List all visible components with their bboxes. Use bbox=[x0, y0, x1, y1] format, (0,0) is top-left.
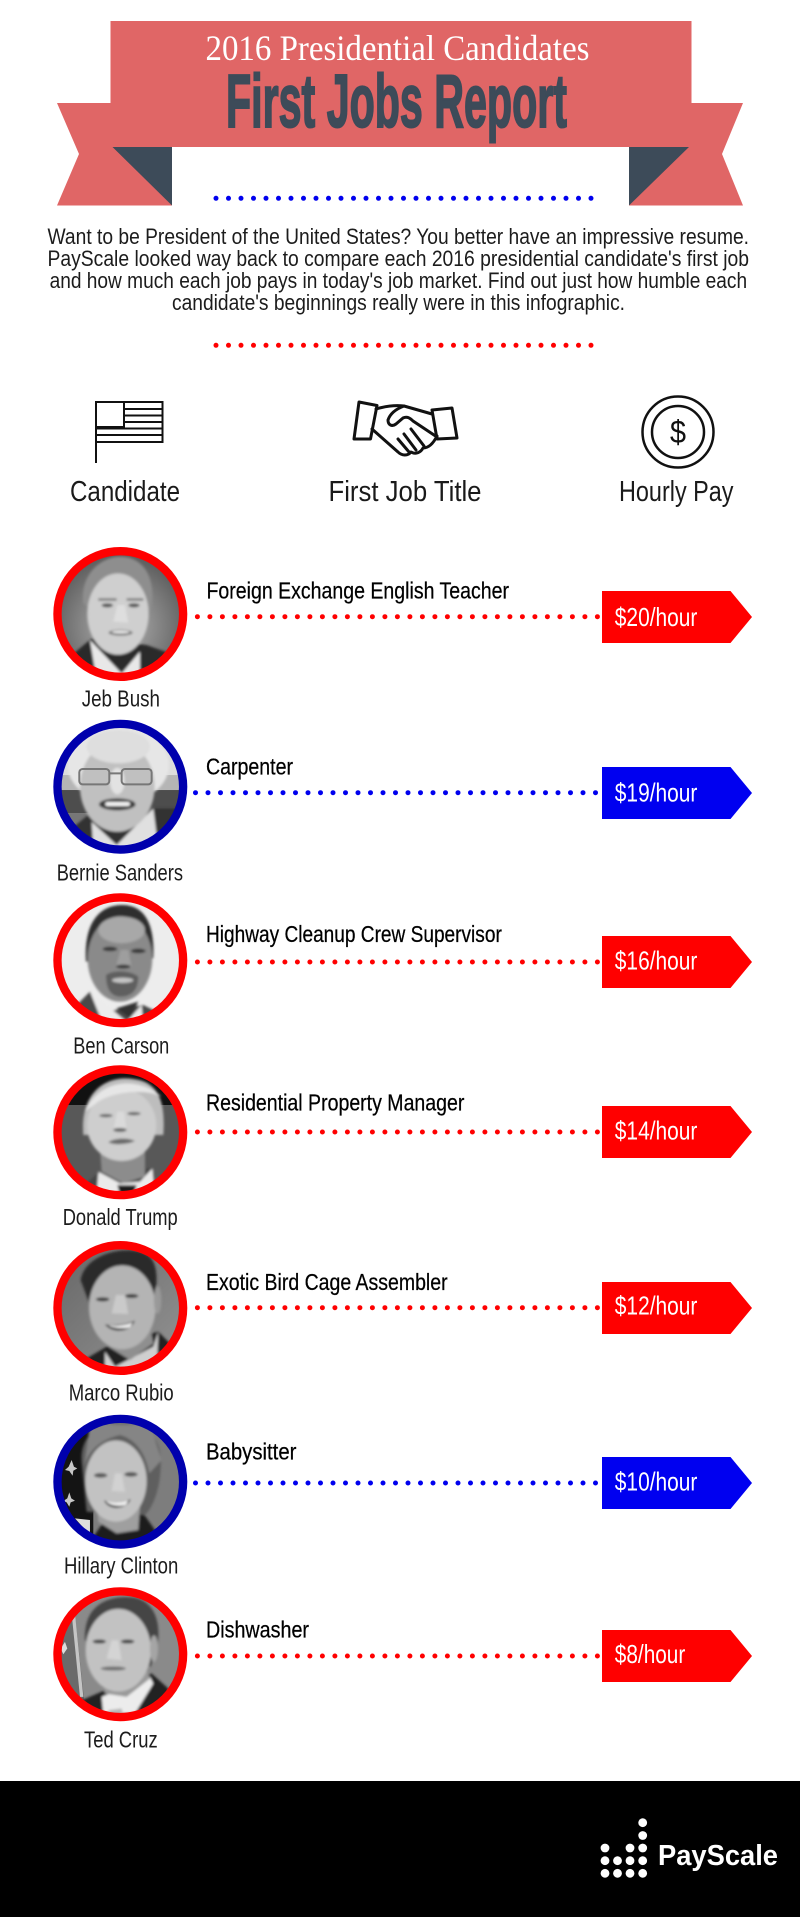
row: Bernie Sanders bbox=[57, 722, 752, 886]
red dotted divider bbox=[216, 343, 594, 348]
intro paragraph bbox=[48, 224, 749, 315]
pay tag bbox=[602, 1106, 752, 1158]
row: Marco Rubio bbox=[57, 1243, 752, 1406]
row: Hillary Clinton bbox=[57, 1418, 752, 1578]
portrait: Donald Trump bbox=[57, 1068, 183, 1198]
job title: Carpenter bbox=[206, 753, 293, 779]
pay tag: $10/hour bbox=[615, 1467, 698, 1497]
candidate name: Marco Rubio bbox=[69, 1380, 174, 1406]
logo wordmark: PayScale bbox=[658, 1840, 778, 1872]
ribbon right fold bbox=[629, 146, 690, 206]
blue dotted divider bbox=[216, 196, 594, 201]
footer bar bbox=[0, 1781, 800, 1917]
pay tag: $12/hour bbox=[615, 1290, 698, 1320]
pay tag: $14/hour bbox=[615, 1115, 698, 1145]
column heading: first job title: First Job Title bbox=[328, 476, 482, 508]
portrait: Jeb Bush bbox=[57, 550, 183, 680]
pay tag bbox=[602, 1282, 752, 1334]
pay tag bbox=[602, 1457, 752, 1509]
candidate name: Hillary Clinton bbox=[64, 1552, 178, 1578]
job title: Exotic Bird Cage Assembler bbox=[206, 1269, 448, 1295]
pay tag: $19/hour bbox=[615, 778, 698, 808]
subtitle: 2016 Presidential Candidates bbox=[206, 28, 590, 68]
pay tag bbox=[602, 1630, 752, 1682]
job title: Residential Property Manager bbox=[206, 1090, 465, 1116]
portrait: Marco Rubio bbox=[57, 1243, 183, 1373]
ribbon left tail bbox=[57, 103, 172, 206]
dotted connector bbox=[197, 960, 599, 964]
ribbon left fold bbox=[112, 147, 172, 206]
portrait: Hillary Clinton bbox=[57, 1418, 183, 1548]
job title: Dishwasher bbox=[206, 1616, 309, 1642]
candidate name: Jeb Bush bbox=[82, 686, 160, 712]
banner ribbon bbox=[57, 21, 743, 206]
row: Ted Cruz bbox=[57, 1590, 752, 1752]
dotted connector bbox=[183, 790, 597, 795]
pay tag bbox=[602, 936, 752, 988]
dotted connector bbox=[197, 614, 599, 619]
pay tag bbox=[602, 767, 752, 819]
job title: Foreign Exchange English Teacher bbox=[206, 577, 509, 603]
row: Jeb Bush bbox=[57, 550, 752, 712]
icon: handshake bbox=[354, 402, 457, 455]
job title: Highway Cleanup Crew Supervisor bbox=[206, 921, 502, 947]
column heading: hourly pay: Hourly Pay bbox=[619, 476, 734, 508]
ribbon right tail bbox=[629, 103, 743, 206]
icon: dollar coin: $ bbox=[670, 414, 686, 450]
pay tag: $16/hour bbox=[615, 945, 698, 975]
intro paragraph: candidate's beginnings really were in this infographic. bbox=[172, 290, 625, 315]
portrait: Ben Carson bbox=[57, 897, 183, 1025]
dotted connector bbox=[197, 1654, 599, 1658]
dotted connector bbox=[183, 1480, 597, 1486]
ribbon main band bbox=[110, 21, 692, 147]
candidate name: Donald Trump bbox=[63, 1204, 178, 1230]
row: Ben Carson bbox=[57, 897, 752, 1058]
dotted connector bbox=[197, 1130, 599, 1134]
PayScale logo bbox=[601, 1818, 778, 1878]
column heading: candidate: Candidate bbox=[70, 476, 180, 508]
pay tag: $8/hour bbox=[615, 1639, 686, 1669]
portrait: Ted Cruz bbox=[57, 1590, 183, 1720]
pay tag: $20/hour bbox=[615, 602, 698, 632]
candidate name: Ben Carson bbox=[73, 1032, 169, 1058]
logo dots bbox=[601, 1818, 647, 1878]
candidate name: Bernie Sanders bbox=[57, 860, 183, 886]
pay tag bbox=[602, 591, 752, 643]
portrait: Bernie Sanders bbox=[57, 722, 183, 853]
row: Donald Trump bbox=[57, 1068, 752, 1230]
job title: Babysitter bbox=[206, 1438, 297, 1464]
candidate name: Ted Cruz bbox=[84, 1726, 158, 1752]
icon: dollar coin bbox=[642, 396, 714, 468]
icon: flag bbox=[96, 402, 162, 463]
dotted connector bbox=[197, 1305, 599, 1310]
